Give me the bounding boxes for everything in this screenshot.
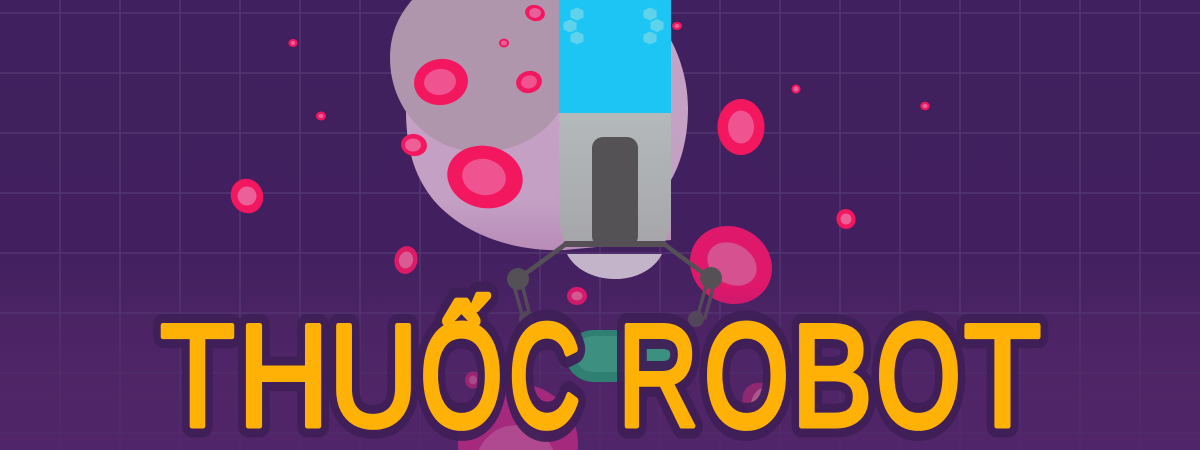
bottom fade [0,285,1200,450]
blood cells on the tissue [399,3,547,215]
capsule: dark slot [592,137,638,247]
floating blood cells [225,22,930,276]
icon: hexagon bubbles [564,8,664,44]
cells behind the robot [567,211,786,319]
robot legs [507,244,722,368]
title outline [160,293,1041,450]
green cell [566,330,675,382]
title fill [160,293,1041,450]
blob: grey overlap circle [390,0,559,152]
title [160,293,1041,450]
capsule: steel body [559,113,671,246]
capsule: blue tank [559,0,671,113]
blob: large tissue shape [406,0,688,250]
capsule: lower dome [567,254,662,279]
faded cells near the bottom [458,372,779,450]
